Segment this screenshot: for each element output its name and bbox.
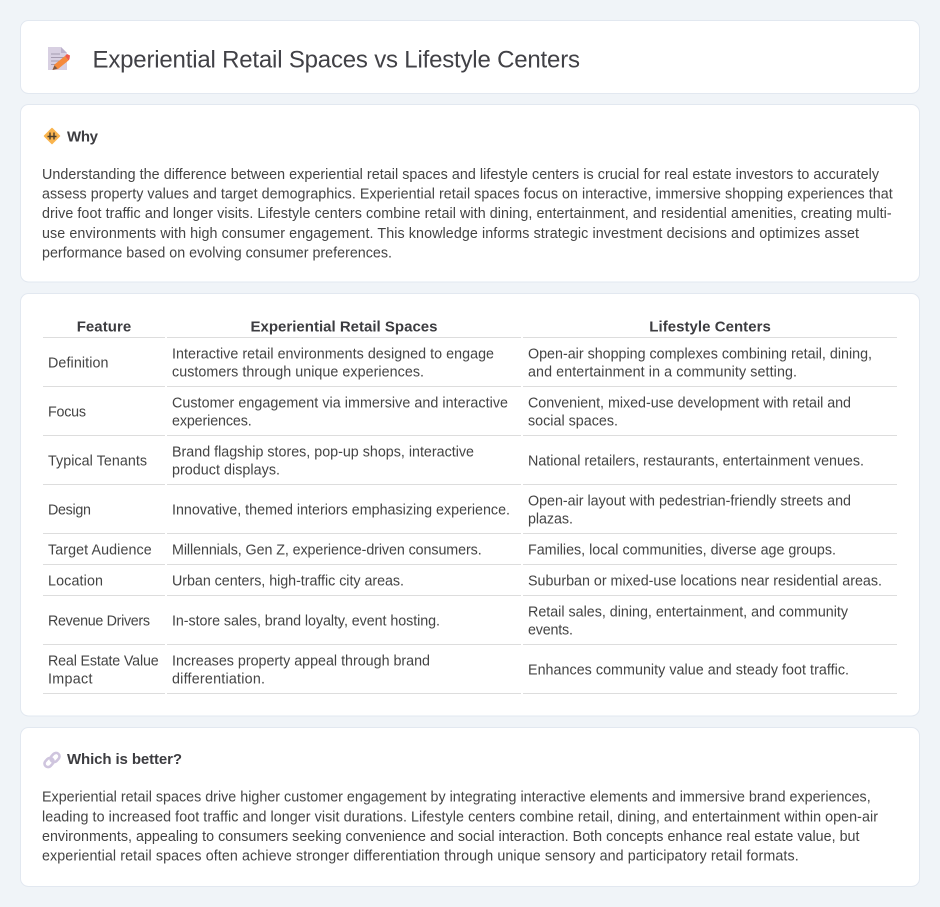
row: real estate value impact: Enhances community value and steady foot traffic. — [528, 662, 849, 678]
row: real estate value impact: Impact — [48, 672, 93, 688]
row: target audience — [43, 542, 897, 565]
row: location: Location — [48, 574, 103, 590]
row: real estate value impact: Increases property appeal through brand — [172, 654, 430, 670]
row: design — [43, 494, 897, 534]
row: location: Urban centers, high-traffic city areas. — [172, 574, 404, 590]
row: design: Open-air layout with pedestrian-friendly streets and — [528, 494, 851, 510]
row: typical tenants: Brand flagship stores, pop-up shops, interactive — [172, 444, 474, 460]
table header row: Feature — [77, 319, 131, 336]
row: definition: and entertainment in a community setting. — [528, 365, 797, 381]
table header row: Lifestyle Centers — [649, 319, 771, 336]
row: focus: Customer engagement via immersive and interactive — [172, 396, 508, 412]
row: typical tenants: National retailers, restaurants, entertainment venues. — [528, 454, 864, 470]
row: typical tenants: product displays. — [172, 463, 280, 479]
text block: which is better paragraph — [42, 790, 878, 864]
text block: which is better paragraph: leading to increased foot traffic and longer visit durations. Lifestyle centers combine retail, dining, and entertainment within open-air — [42, 809, 878, 825]
row: revenue drivers — [43, 604, 897, 645]
text block: why paragraph: assess property values and target demographics. Experiential retail spaces focus on interactive, immersive shopping experiences that — [42, 187, 893, 203]
text block: why paragraph — [42, 167, 893, 261]
row: design: Innovative, themed interiors emphasizing experience. — [172, 502, 510, 518]
heading: why: Why — [67, 129, 99, 146]
row: location — [43, 574, 897, 596]
row: definition — [43, 346, 897, 387]
text block: why paragraph: performance based on evolving consumer preferences. — [42, 245, 392, 261]
row: target audience: Millennials, Gen Z, experience-driven consumers. — [172, 542, 482, 558]
row: target audience: Families, local communities, diverse age groups. — [528, 542, 836, 558]
row: focus: social spaces. — [528, 414, 618, 430]
row: typical tenants — [43, 444, 897, 485]
row: revenue drivers: In-store sales, brand loyalty, event hosting. — [172, 614, 440, 630]
icon: warning diamond — [44, 128, 60, 144]
icon: memo with pencil — [48, 47, 70, 70]
icon: link — [43, 751, 61, 769]
row: definition: Interactive retail environments designed to engage — [172, 346, 494, 362]
row: focus: experiences. — [172, 414, 252, 430]
row: location: Suburban or mixed-use locations near residential areas. — [528, 574, 882, 590]
row: revenue drivers: events. — [528, 623, 573, 639]
row: definition: Definition — [48, 356, 109, 372]
title: Experiential Retail Spaces vs Lifestyle Centers — [92, 46, 580, 74]
text block: which is better paragraph: environments, appealing to consumers seeking convenience and social interaction. Both concepts enhance real estate value, but — [42, 829, 860, 845]
row: definition: Open-air shopping complexes combining retail, dining, — [528, 346, 872, 362]
text block: which is better paragraph: experiential retail spaces often achieve stronger differentiation through unique sensory and participatory retail formats. — [42, 848, 799, 864]
table header row — [43, 319, 897, 338]
panel: title header — [20, 20, 920, 94]
panel: why — [20, 104, 920, 282]
text block: which is better paragraph: Experiential retail spaces drive higher customer engagement by integrating interactive elements and immersive brand experiences, — [42, 790, 871, 806]
text block: why paragraph: drive foot traffic and longer visits. Lifestyle centers combine retail with dining, entertainment, and residential amenities, creating multi- — [42, 206, 892, 222]
text block: why paragraph: use environments with high consumer engagement. This knowledge informs strategic investment decisions and optimizes asset — [42, 226, 859, 242]
row: revenue drivers: Revenue Drivers — [48, 614, 150, 630]
table header row: Experiential Retail Spaces — [250, 319, 438, 336]
row: focus — [43, 396, 897, 436]
heading: which is better: Which is better? — [67, 751, 182, 768]
panel: which is better — [20, 728, 920, 886]
panel: comparison table — [20, 294, 920, 716]
row: real estate value impact — [43, 654, 897, 694]
row: focus: Focus — [48, 404, 86, 420]
row: revenue drivers: Retail sales, dining, entertainment, and community — [528, 604, 849, 620]
row: definition: customers through unique experiences. — [172, 365, 424, 381]
row: design: Design — [48, 502, 91, 518]
row: real estate value impact: differentiation. — [172, 672, 265, 688]
row: design: plazas. — [528, 512, 573, 528]
row: focus: Convenient, mixed-use development with retail and — [528, 396, 851, 412]
row: target audience: Target Audience — [48, 542, 152, 558]
row: typical tenants: Typical Tenants — [48, 454, 147, 470]
row: real estate value impact: Real Estate Value — [48, 654, 159, 670]
text block: why paragraph: Understanding the difference between experiential retail spaces and lifestyle centers is crucial for real estate investors to accurately — [42, 167, 880, 183]
